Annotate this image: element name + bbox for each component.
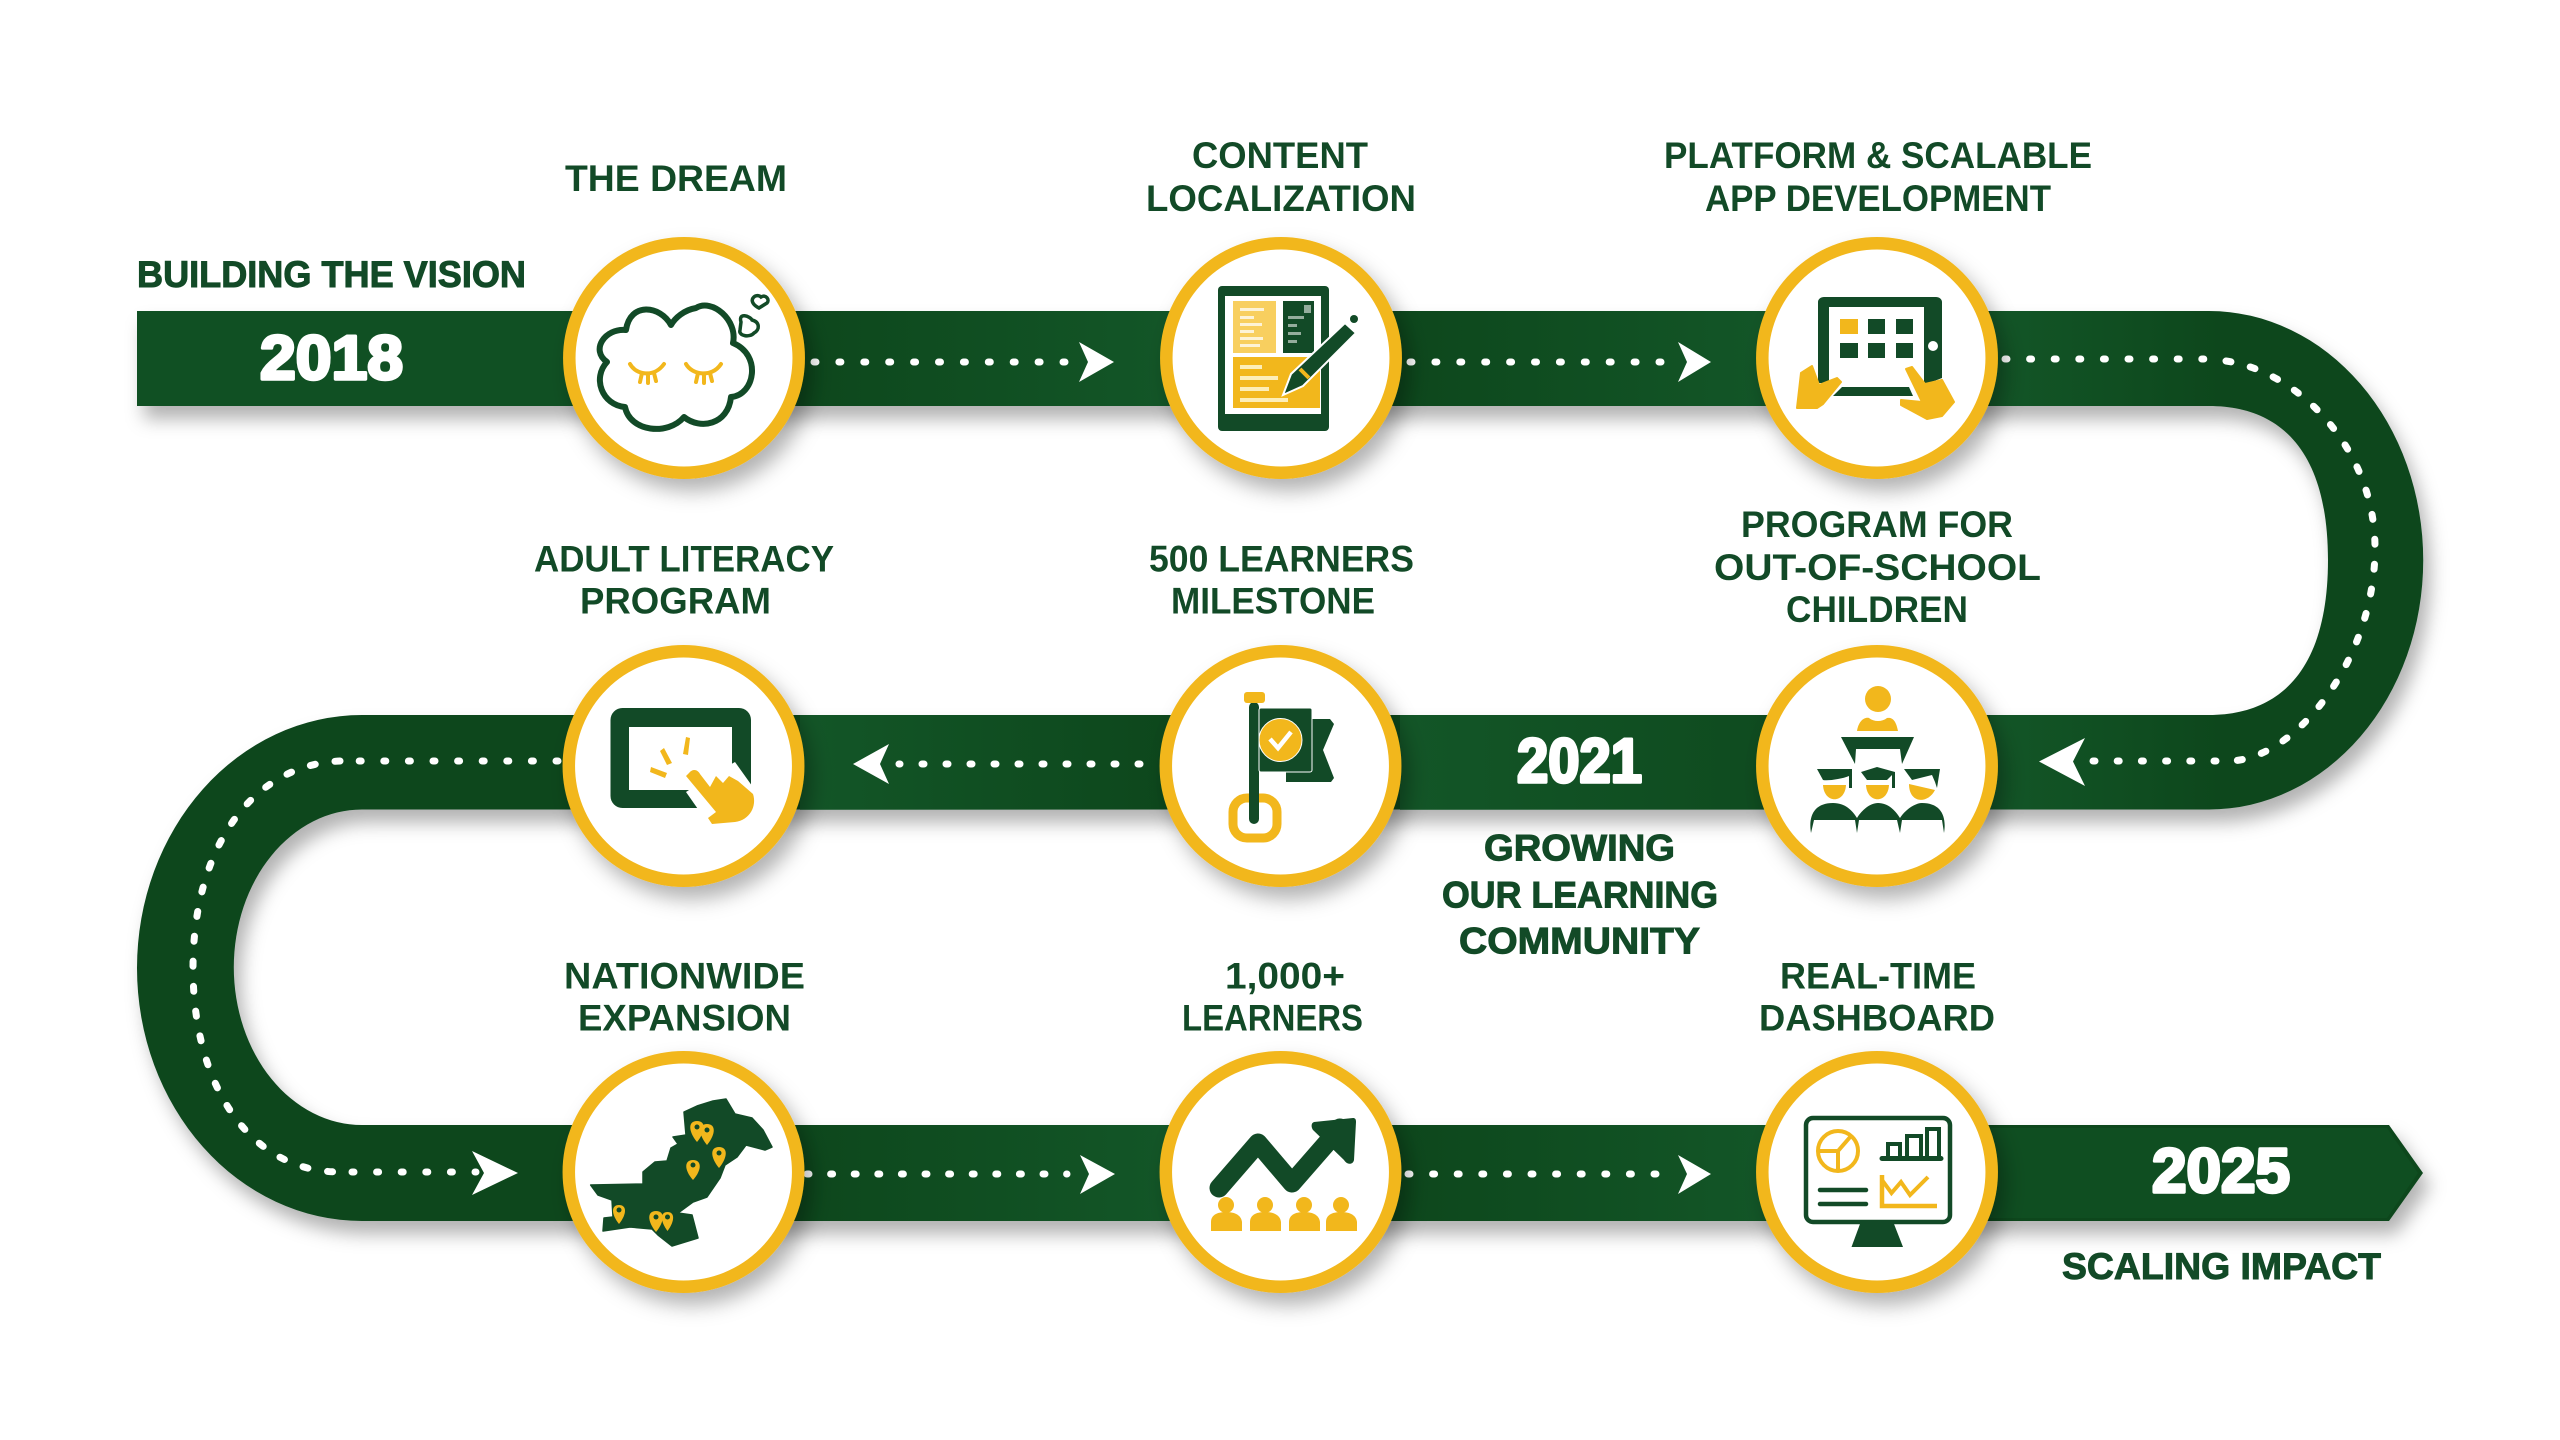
icon: tablet and pen [1218, 286, 1358, 431]
label: nationwide expansion: NATIONWIDE [564, 954, 805, 996]
label: program for out-of-school children: OUT-OF-SCHOOL [1714, 546, 2041, 588]
year 2021: 2021 [1517, 727, 1642, 796]
label: program for out-of-school children: PROGRAM FOR [1741, 503, 2013, 545]
dotted route line [193, 359, 2375, 1174]
label: program for out-of-school children [1714, 503, 2041, 630]
heading: growing our learning community: OUR LEARNING [1442, 874, 1718, 916]
icon: dreaming cloud [600, 296, 768, 429]
icon: flag with check [1233, 692, 1334, 838]
icon: growth arrow and people [1211, 1118, 1357, 1231]
circle: program for out-of-school children [1762, 651, 1992, 881]
circle: platform and scalable app development [1762, 243, 1992, 473]
icon: tablet with hands [1797, 297, 1954, 419]
circle: nationwide expansion [569, 1057, 798, 1287]
circle: adult literacy program [569, 651, 798, 881]
year 2025: 2025 [2152, 1137, 2290, 1206]
label: adult literacy program [534, 538, 834, 622]
circle: real-time dashboard [1762, 1057, 1992, 1287]
heading: building the vision: BUILDING THE VISION [137, 253, 526, 295]
label: 1,000+ learners: 1,000+ [1225, 954, 1345, 996]
label: real-time dashboard [1759, 954, 1995, 1038]
direction arrows [472, 342, 2085, 1195]
label: content localization [1146, 134, 1416, 219]
label: adult literacy program: PROGRAM [580, 580, 771, 622]
label: 1,000+ learners [1182, 954, 1363, 1038]
circle: 1,000+ learners [1166, 1057, 1395, 1287]
icon: touch screen [610, 708, 755, 824]
label: the dream: THE DREAM [565, 157, 787, 199]
label: program for out-of-school children: CHILDREN [1786, 588, 1968, 630]
icon: dashboard monitor [1806, 1118, 1950, 1247]
label: platform and scalable app development: APP DEVELOPMENT [1705, 177, 2051, 219]
heading: growing our learning community: COMMUNITY [1459, 920, 1700, 962]
label: content localization: CONTENT [1192, 134, 1368, 176]
label: content localization: LOCALIZATION [1146, 177, 1416, 219]
heading: growing our learning community [1442, 826, 1718, 962]
winding road [137, 311, 2423, 1221]
label: 500 learners milestone: 500 LEARNERS [1149, 538, 1414, 580]
heading: scaling impact: SCALING IMPACT [2062, 1245, 2381, 1287]
icon: Pakistan map with pins [591, 1099, 772, 1246]
circle: content localization [1166, 243, 1396, 473]
heading: growing our learning community: GROWING [1484, 826, 1675, 868]
label: 500 learners milestone: MILESTONE [1171, 580, 1375, 622]
label: real-time dashboard: REAL-TIME [1780, 954, 1976, 996]
label: platform and scalable app development [1664, 134, 2092, 219]
label: platform and scalable app development: PLATFORM & SCALABLE [1664, 134, 2092, 176]
label: adult literacy program: ADULT LITERACY [534, 538, 834, 580]
label: nationwide expansion [564, 954, 805, 1038]
year 2018: 2018 [260, 324, 403, 393]
label: 1,000+ learners: LEARNERS [1182, 996, 1363, 1038]
label: nationwide expansion: EXPANSION [578, 996, 791, 1038]
icon: teacher and students [1810, 686, 1945, 833]
circle: 500 learners milestone [1166, 651, 1395, 881]
label: real-time dashboard: DASHBOARD [1759, 996, 1995, 1038]
circle: the dream [569, 243, 799, 473]
label: 500 learners milestone [1149, 538, 1414, 622]
